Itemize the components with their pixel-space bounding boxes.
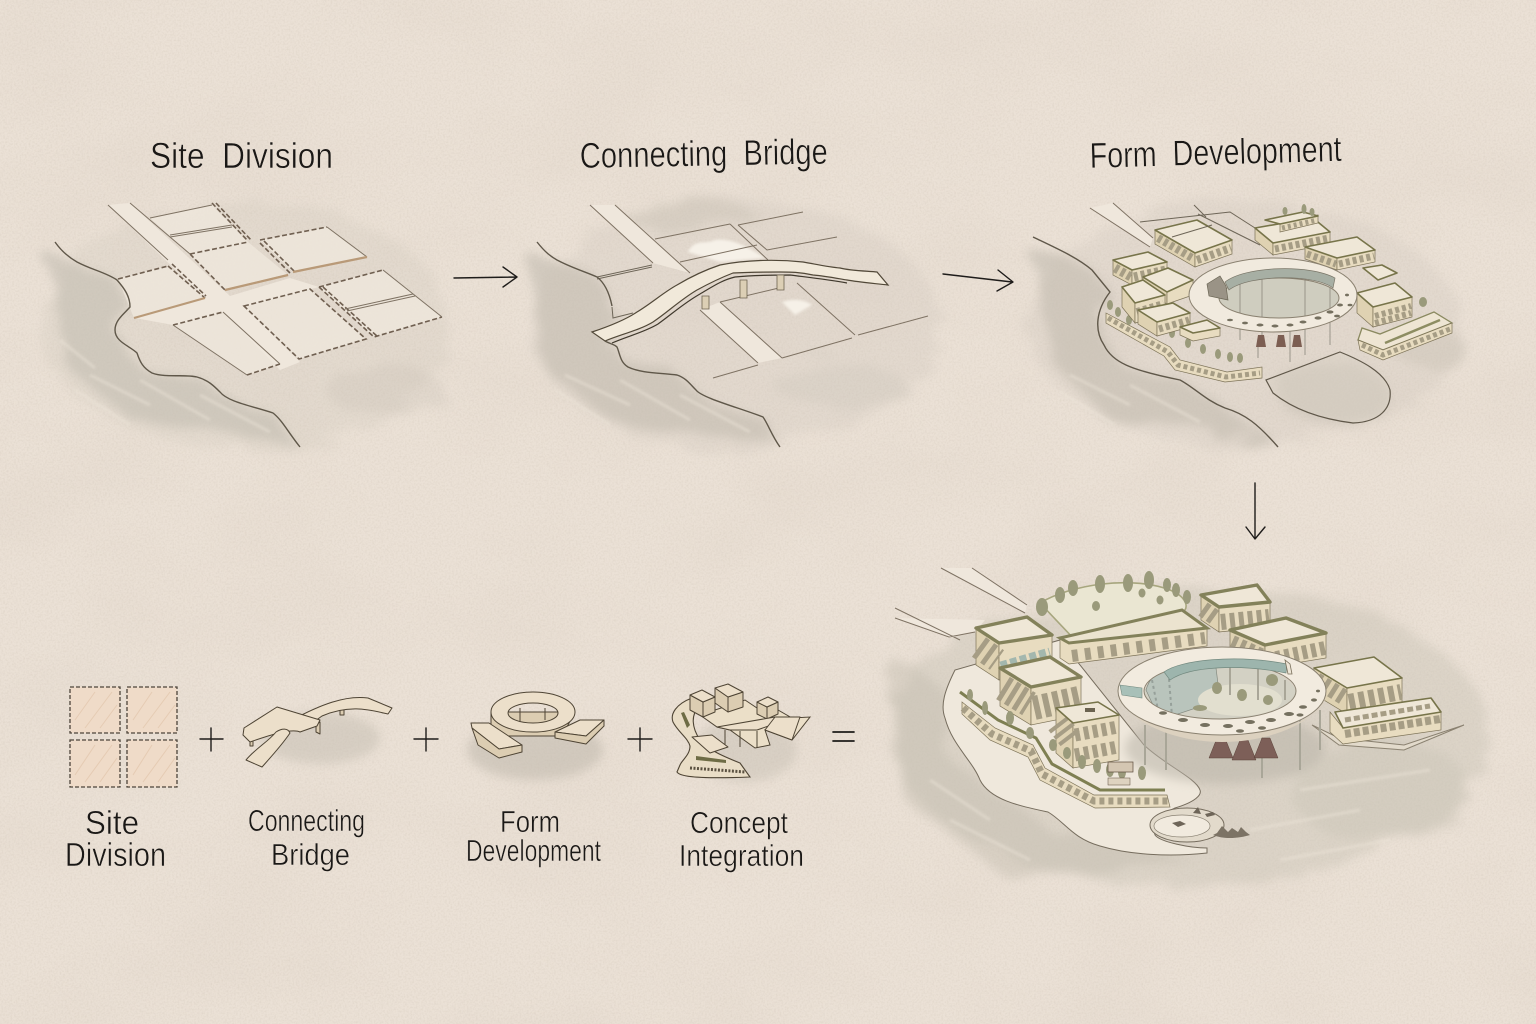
ink wash under site [1030, 203, 1460, 447]
trees on terrace [967, 689, 1146, 780]
label: Concept Integration: Integration [679, 838, 804, 873]
white glare blobs [688, 240, 812, 315]
streaks on water [555, 375, 750, 432]
icon: four dashed site squares [70, 687, 177, 787]
shoreline [537, 242, 780, 447]
buildings [1113, 204, 1412, 341]
streaks on water [930, 770, 1430, 860]
panel: final concept integration masterplan [885, 568, 1490, 885]
bridge deck [592, 260, 888, 343]
ring building with glass and columns [1118, 647, 1327, 778]
label: Form Development: Development [466, 833, 601, 868]
streaks on water [60, 340, 270, 432]
roads and plots [590, 205, 928, 378]
road surface [108, 203, 319, 370]
label: Site Division: Site [85, 804, 139, 841]
arrow: bridge to form [943, 270, 1013, 291]
label: Connecting Bridge: Connecting [248, 803, 365, 838]
arrow: site to bridge [454, 267, 517, 287]
equals sign [833, 732, 854, 741]
label: Concept Integration: Concept [690, 805, 788, 840]
heading: Connecting Bridge: Connecting Bridge [579, 131, 828, 176]
shoreline [55, 242, 300, 447]
trees [1107, 297, 1427, 363]
plus sign 3 [628, 728, 652, 751]
ink wash under site [885, 585, 1490, 885]
terraces [1106, 312, 1452, 382]
icon: concept integration [672, 684, 810, 782]
label: Connecting Bridge: Bridge [271, 837, 350, 872]
glass ring building [1189, 258, 1357, 362]
icon: connecting bridge [243, 697, 392, 767]
heading: Site Division: Site Division [150, 135, 333, 176]
panel: connecting bridge [525, 200, 940, 450]
ink wash under site [525, 200, 940, 450]
arcade terrace left [960, 692, 1170, 808]
heading: Form Development: Form Development [1089, 128, 1342, 176]
shoreline land [943, 640, 1207, 855]
panel: site division [40, 200, 450, 450]
label: Form Development: Form [500, 804, 560, 839]
upper garden [1036, 571, 1191, 640]
label: Site Division: Division [65, 836, 166, 873]
dashed site plots [108, 203, 442, 375]
final buildings [976, 585, 1464, 768]
pond under ring [1125, 712, 1325, 784]
plus sign 1 [200, 728, 223, 751]
streaks on water [1060, 375, 1200, 425]
ink wash under site [40, 200, 450, 450]
roads and shoreline [1033, 203, 1390, 447]
panel: form development [1030, 203, 1460, 447]
cafe pavilion [1108, 762, 1133, 785]
icon: form development [467, 692, 604, 780]
plus sign 2 [414, 728, 438, 751]
small island and boat [1150, 807, 1250, 842]
road [895, 568, 1027, 640]
arrow: form to final [1246, 483, 1265, 539]
